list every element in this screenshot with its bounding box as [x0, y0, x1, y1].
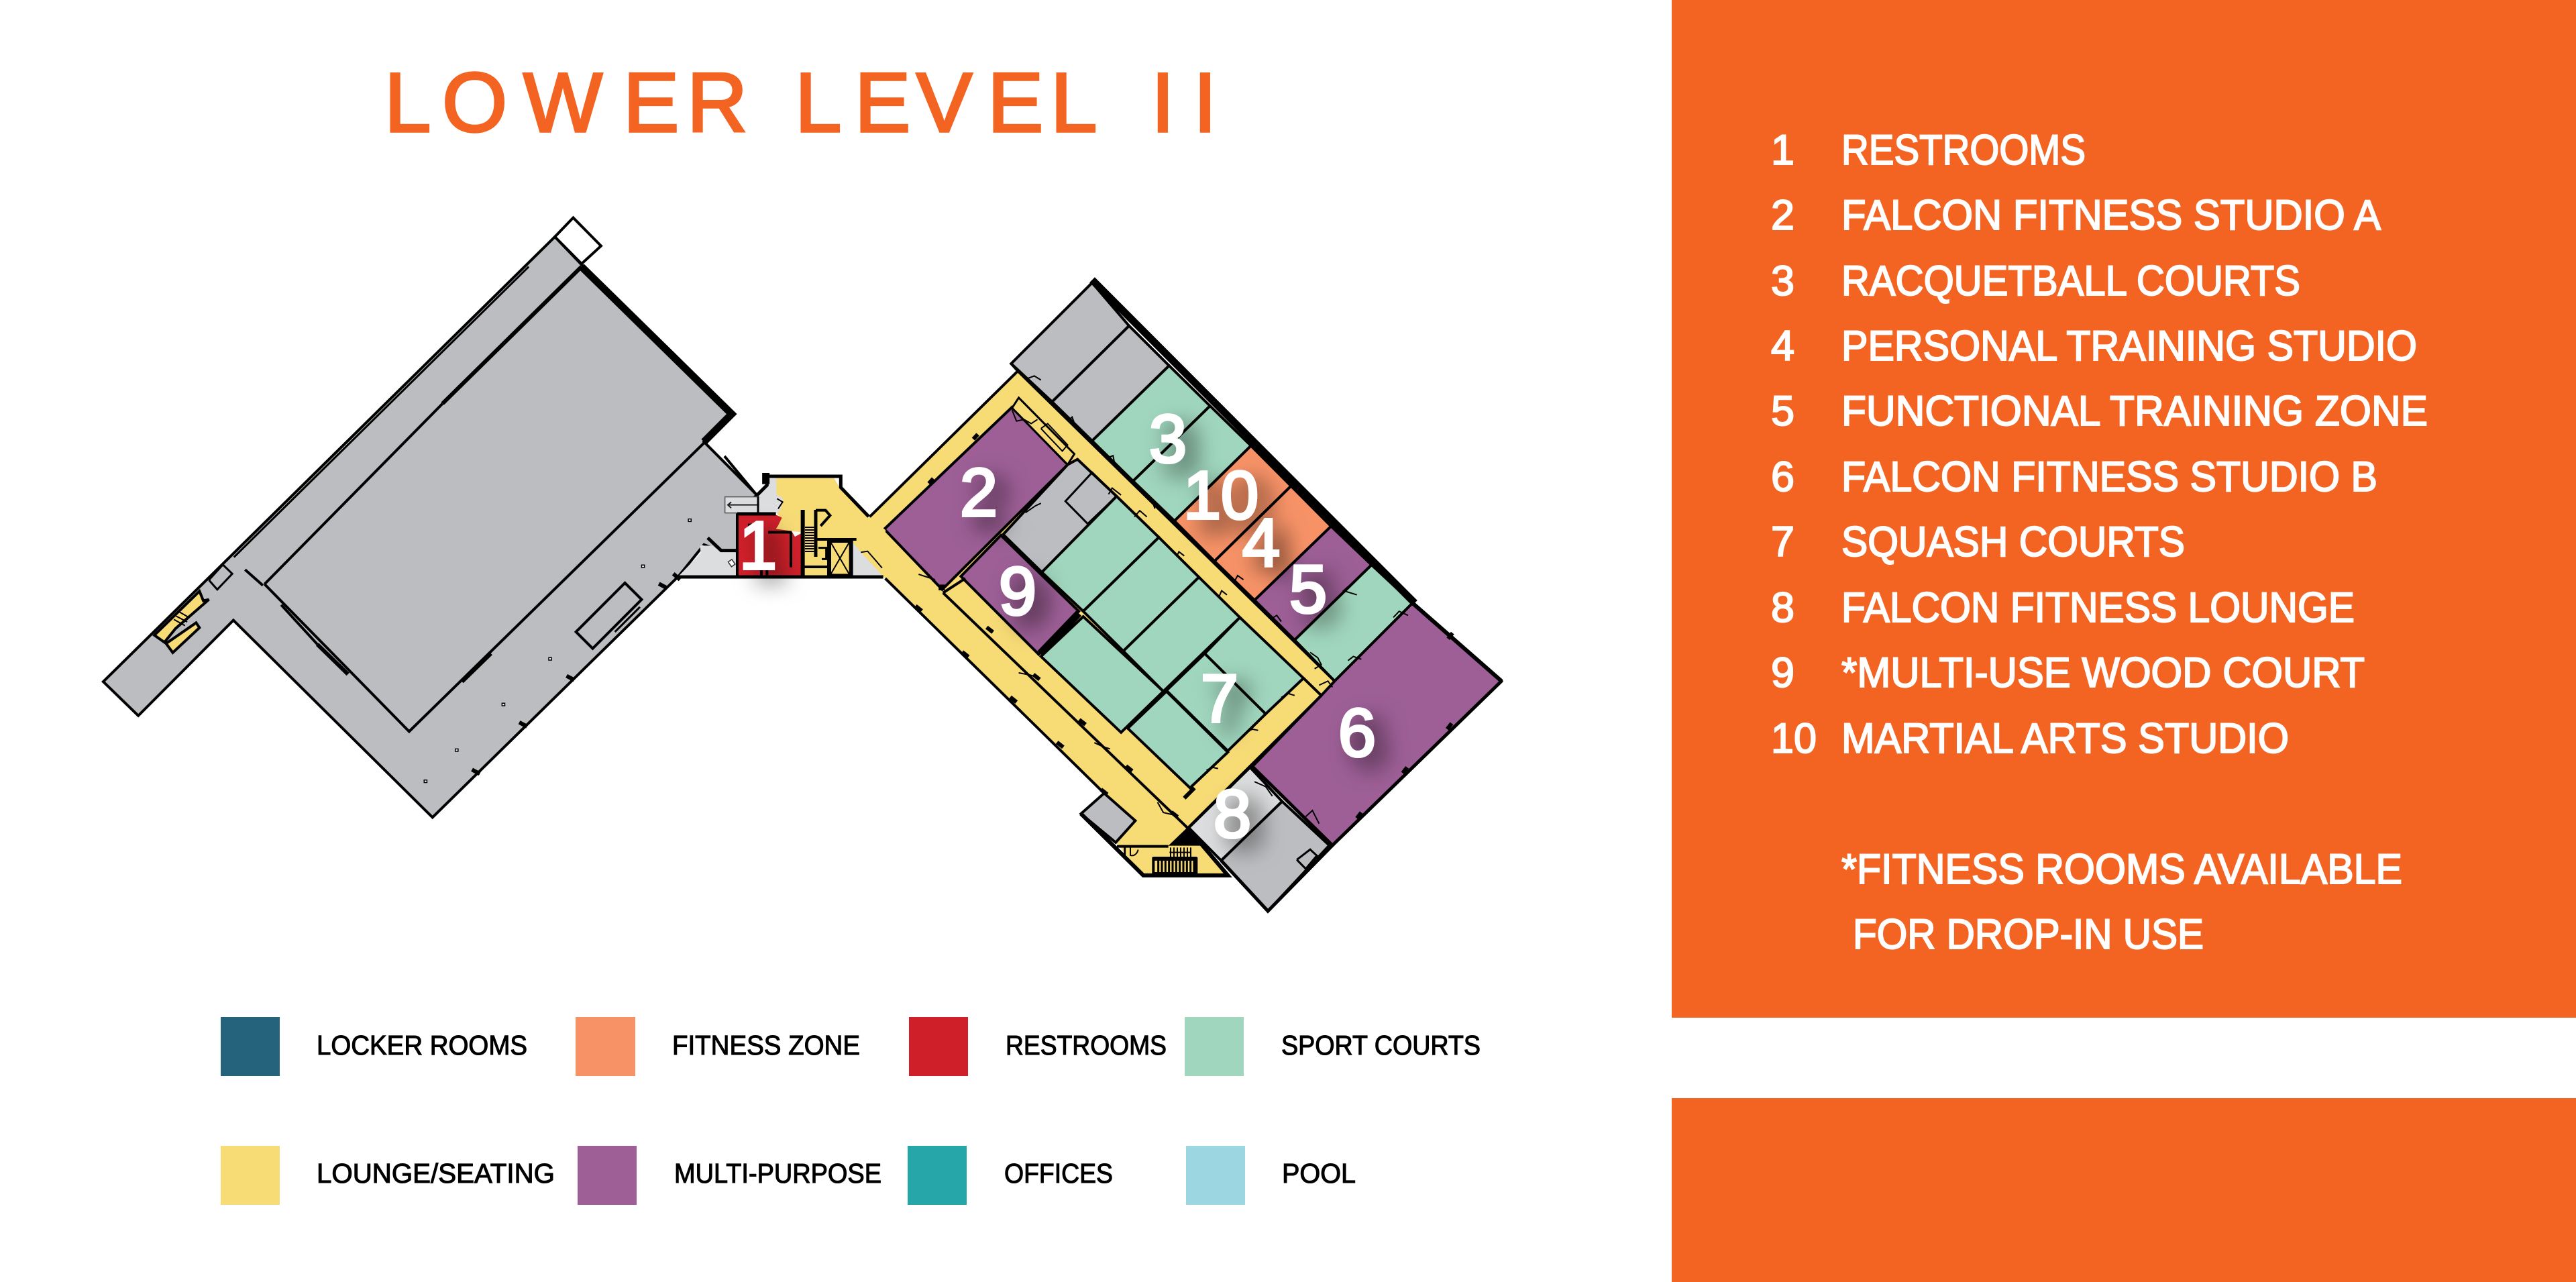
panel: bottom orange band	[1672, 1098, 2576, 1282]
lounge room 8	[1189, 767, 1282, 861]
list row 5: FUNCTIONAL TRAINING ZONE	[1841, 388, 2428, 435]
gray room lower	[1221, 802, 1330, 911]
legend item: restrooms	[909, 1017, 1167, 1076]
light gray vestibule	[758, 478, 783, 513]
number 8: 8	[1214, 777, 1251, 852]
legend item: pool	[1186, 1146, 1356, 1205]
list row 8: 8	[1771, 584, 1794, 631]
list row 4: PERSONAL TRAINING STUDIO	[1841, 323, 2417, 370]
light gray lower left	[682, 545, 736, 576]
list row 10: MARTIAL ARTS STUDIO	[1841, 715, 2289, 762]
list row 6: FALCON FITNESS STUDIO B	[1841, 453, 2377, 500]
legend item: restrooms: RESTROOMS	[1006, 1030, 1167, 1061]
legend item: offices	[908, 1146, 1113, 1205]
list row 10: 10	[1771, 715, 1817, 762]
multi-purpose room 6	[1252, 603, 1501, 845]
list row 4: 4	[1771, 323, 1794, 370]
number 3: 3	[1149, 402, 1187, 477]
room numbers on the map	[739, 402, 1376, 852]
list row 9: *MULTI-USE WOOD COURT	[1841, 649, 2365, 696]
legend item: sport courts	[1185, 1017, 1481, 1076]
list row 5: 5	[1771, 388, 1794, 435]
list row 9: 9	[1771, 649, 1794, 696]
number 6: 6	[1338, 696, 1376, 771]
legend item: locker rooms	[221, 1017, 527, 1076]
light gray lower right	[852, 541, 882, 576]
number 5: 5	[1289, 552, 1327, 627]
right building: corridors and rooms	[850, 280, 1501, 911]
sport courts: squash	[1041, 496, 1303, 788]
floor plan	[103, 218, 1501, 911]
title: LOWER LEVEL II	[384, 56, 1217, 150]
list row 6: 6	[1771, 453, 1794, 500]
legend item: pool: POOL	[1282, 1158, 1356, 1189]
fitness zone rooms	[1175, 445, 1331, 600]
sport courts: racquetball	[1092, 366, 1251, 521]
legend item: lounge/seating	[221, 1146, 555, 1205]
number 2: 2	[960, 456, 998, 531]
wall ticks and pillars	[424, 519, 691, 782]
number 7: 7	[1201, 661, 1238, 737]
legend item: fitness zone	[576, 1017, 860, 1076]
gray service area	[1003, 460, 1117, 572]
corridor: yellow lounge/seating	[850, 371, 1335, 875]
number 4: 4	[1242, 506, 1280, 581]
multi-purpose room 9	[961, 535, 1079, 654]
corridor walls	[869, 280, 1501, 911]
restroom inner walls	[737, 514, 792, 576]
legend item: offices: OFFICES	[1004, 1158, 1113, 1189]
number 1: 1	[739, 509, 777, 584]
list row 8: FALCON FITNESS LOUNGE	[1841, 584, 2355, 631]
lobby yellow	[776, 478, 885, 577]
elevator	[829, 541, 851, 576]
list row 2: 2	[1771, 192, 1794, 239]
arrow sign box	[725, 497, 759, 513]
lobby stair core and restrooms	[676, 456, 885, 577]
legend item: lounge/seating: LOUNGE/SEATING	[317, 1158, 555, 1189]
lower lobby and stair	[1117, 829, 1203, 873]
stair block	[1117, 847, 1197, 873]
list row 3: 3	[1771, 258, 1794, 305]
legend item: locker rooms: LOCKER ROOMS	[317, 1030, 527, 1061]
legend item: fitness zone: FITNESS ZONE	[672, 1030, 860, 1061]
lobby outer walls	[676, 456, 883, 577]
list row 1: 1	[1771, 127, 1794, 174]
number 10: 10	[1183, 458, 1258, 533]
sport court beside room 5	[1295, 565, 1413, 681]
yellow stair area	[154, 591, 209, 653]
left building: gray wing	[103, 218, 757, 817]
restroom red	[737, 515, 801, 576]
panel: top orange room list background	[1672, 0, 2576, 1018]
gray rooms top	[1011, 282, 1169, 441]
list row 1: RESTROOMS	[1841, 127, 2086, 174]
list row 7: SQUASH COURTS	[1841, 519, 2185, 566]
door swings	[918, 376, 1408, 824]
footnote: FOR DROP-IN USE	[1853, 911, 2204, 958]
multi-purpose room 2	[884, 407, 1068, 590]
black triangle core	[1169, 829, 1203, 846]
number 9: 9	[999, 554, 1036, 629]
wall ticks	[916, 434, 1452, 818]
legend item: multi-purpose: MULTI-PURPOSE	[674, 1158, 881, 1189]
list row 3: RACQUETBALL COURTS	[1841, 258, 2300, 305]
list row 2: FALCON FITNESS STUDIO A	[1841, 192, 2381, 239]
stair core	[803, 510, 857, 576]
legend item: sport courts: SPORT COURTS	[1281, 1030, 1481, 1061]
legend	[221, 1017, 1481, 1205]
list row 7: 7	[1771, 519, 1794, 566]
stair closet	[1012, 398, 1074, 465]
legend item: multi-purpose	[578, 1146, 881, 1205]
room list	[1771, 127, 2428, 958]
footnote	[1841, 846, 2402, 958]
multi-purpose room 5	[1254, 526, 1372, 640]
footnote: *FITNESS ROOMS AVAILABLE	[1841, 846, 2402, 893]
